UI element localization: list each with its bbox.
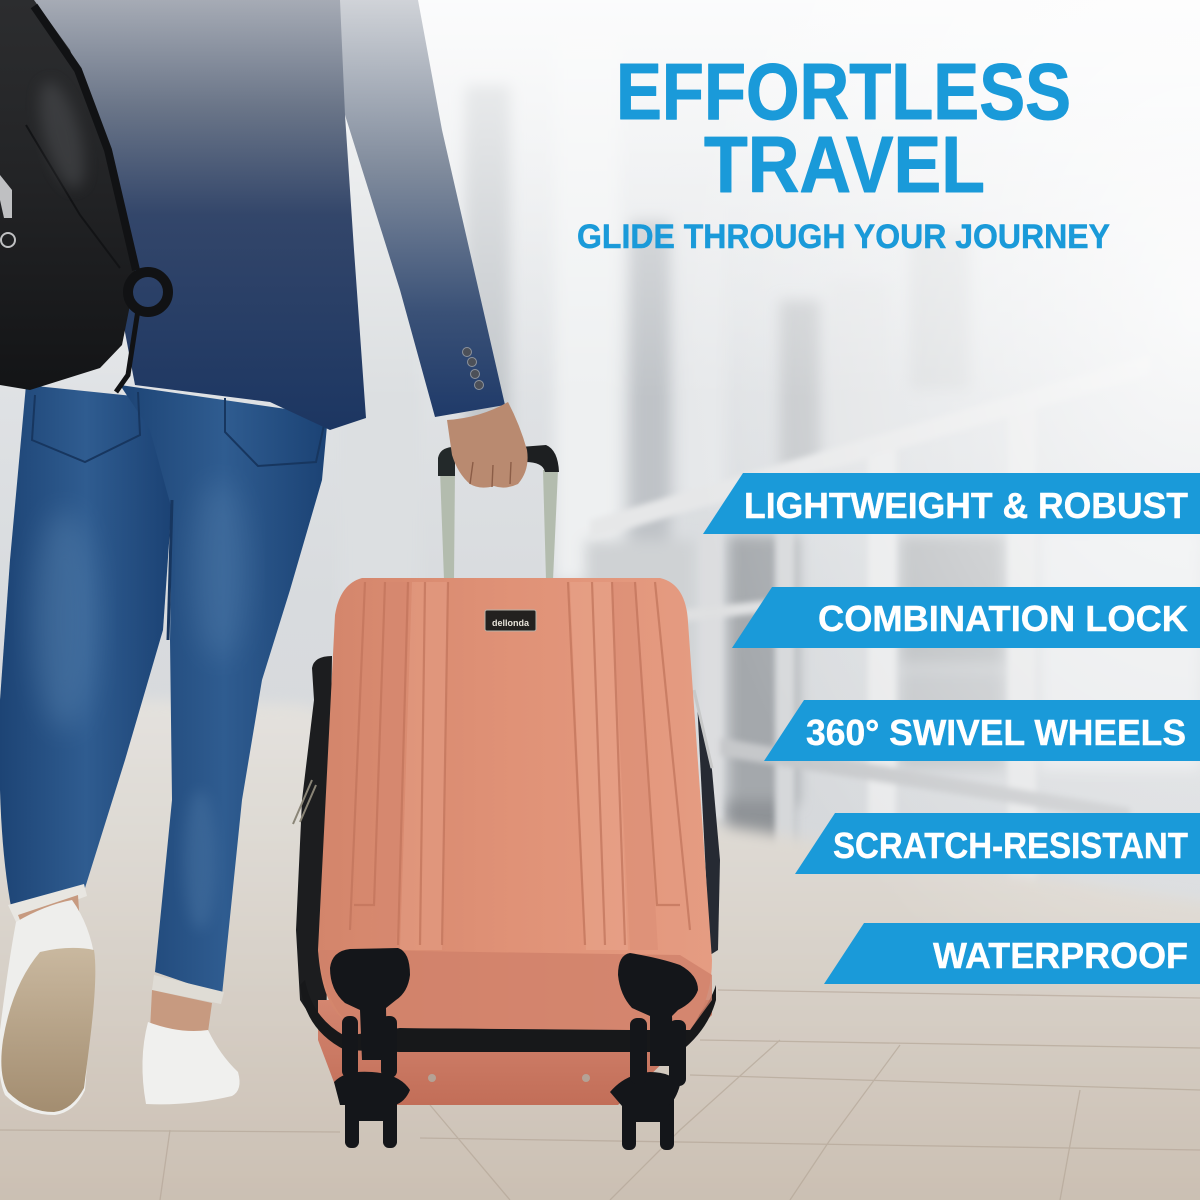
hand on handle xyxy=(447,402,528,488)
zipper band xyxy=(300,980,716,1052)
feature banner: waterproof: WATERPROOF xyxy=(933,935,1188,976)
bag strap loop xyxy=(128,272,168,312)
title line 1: EFFORTLESS xyxy=(616,47,1071,136)
black backpack xyxy=(0,0,136,390)
jacket body xyxy=(30,0,366,430)
lower shell xyxy=(318,1000,712,1105)
subtitle: GLIDE THROUGH YOUR JOURNEY xyxy=(577,218,1110,256)
feature banner: lightweight: LIGHTWEIGHT & ROBUST xyxy=(744,485,1188,526)
brand badge: dellonda xyxy=(492,618,530,628)
shell ribs xyxy=(350,582,690,945)
feature banner: wheels: 360° SWIVEL WHEELS xyxy=(806,712,1186,753)
blurred railings xyxy=(590,355,1150,920)
blurred architecture columns xyxy=(340,40,1200,860)
right shoe xyxy=(142,1022,240,1104)
underside highlight xyxy=(318,950,712,1030)
floor tile lines xyxy=(0,990,1200,1200)
zipper lower xyxy=(398,1030,633,1050)
fog overlays xyxy=(0,0,1200,400)
left shoe xyxy=(0,900,95,1115)
side pocket and strap xyxy=(296,656,332,1040)
title line 2: TRAVEL xyxy=(704,120,985,209)
person walking away xyxy=(0,0,505,1115)
ankles xyxy=(18,895,80,945)
jacket sleeve xyxy=(340,0,505,417)
rear left wheel assembly xyxy=(334,1072,410,1148)
brand badge xyxy=(485,610,536,631)
feature banner: waterproof xyxy=(824,923,1200,984)
jeans: right leg xyxy=(120,385,328,995)
bag zip pull xyxy=(0,175,12,218)
rear right wheel assembly xyxy=(610,1072,680,1150)
feature banner: lock xyxy=(732,587,1200,648)
title xyxy=(577,47,1110,256)
sleeve buttons xyxy=(462,348,484,390)
suitcase xyxy=(293,445,720,1150)
front left wheel xyxy=(330,948,410,1078)
jeans fades and pockets xyxy=(32,392,324,640)
feature banner: wheels xyxy=(764,700,1200,761)
telescopic handle xyxy=(438,445,559,580)
main shell xyxy=(318,578,712,1030)
feature banner: scratch xyxy=(795,813,1200,874)
feature banner: lock: COMBINATION LOCK xyxy=(818,598,1188,639)
front right wheel xyxy=(618,953,698,1086)
jeans: left leg xyxy=(0,385,172,912)
rivets xyxy=(428,1074,436,1082)
trouser cuffs xyxy=(8,884,87,922)
floor xyxy=(0,695,1200,1200)
feature banner: lightweight xyxy=(703,473,1200,534)
shell rib bands xyxy=(372,582,658,950)
